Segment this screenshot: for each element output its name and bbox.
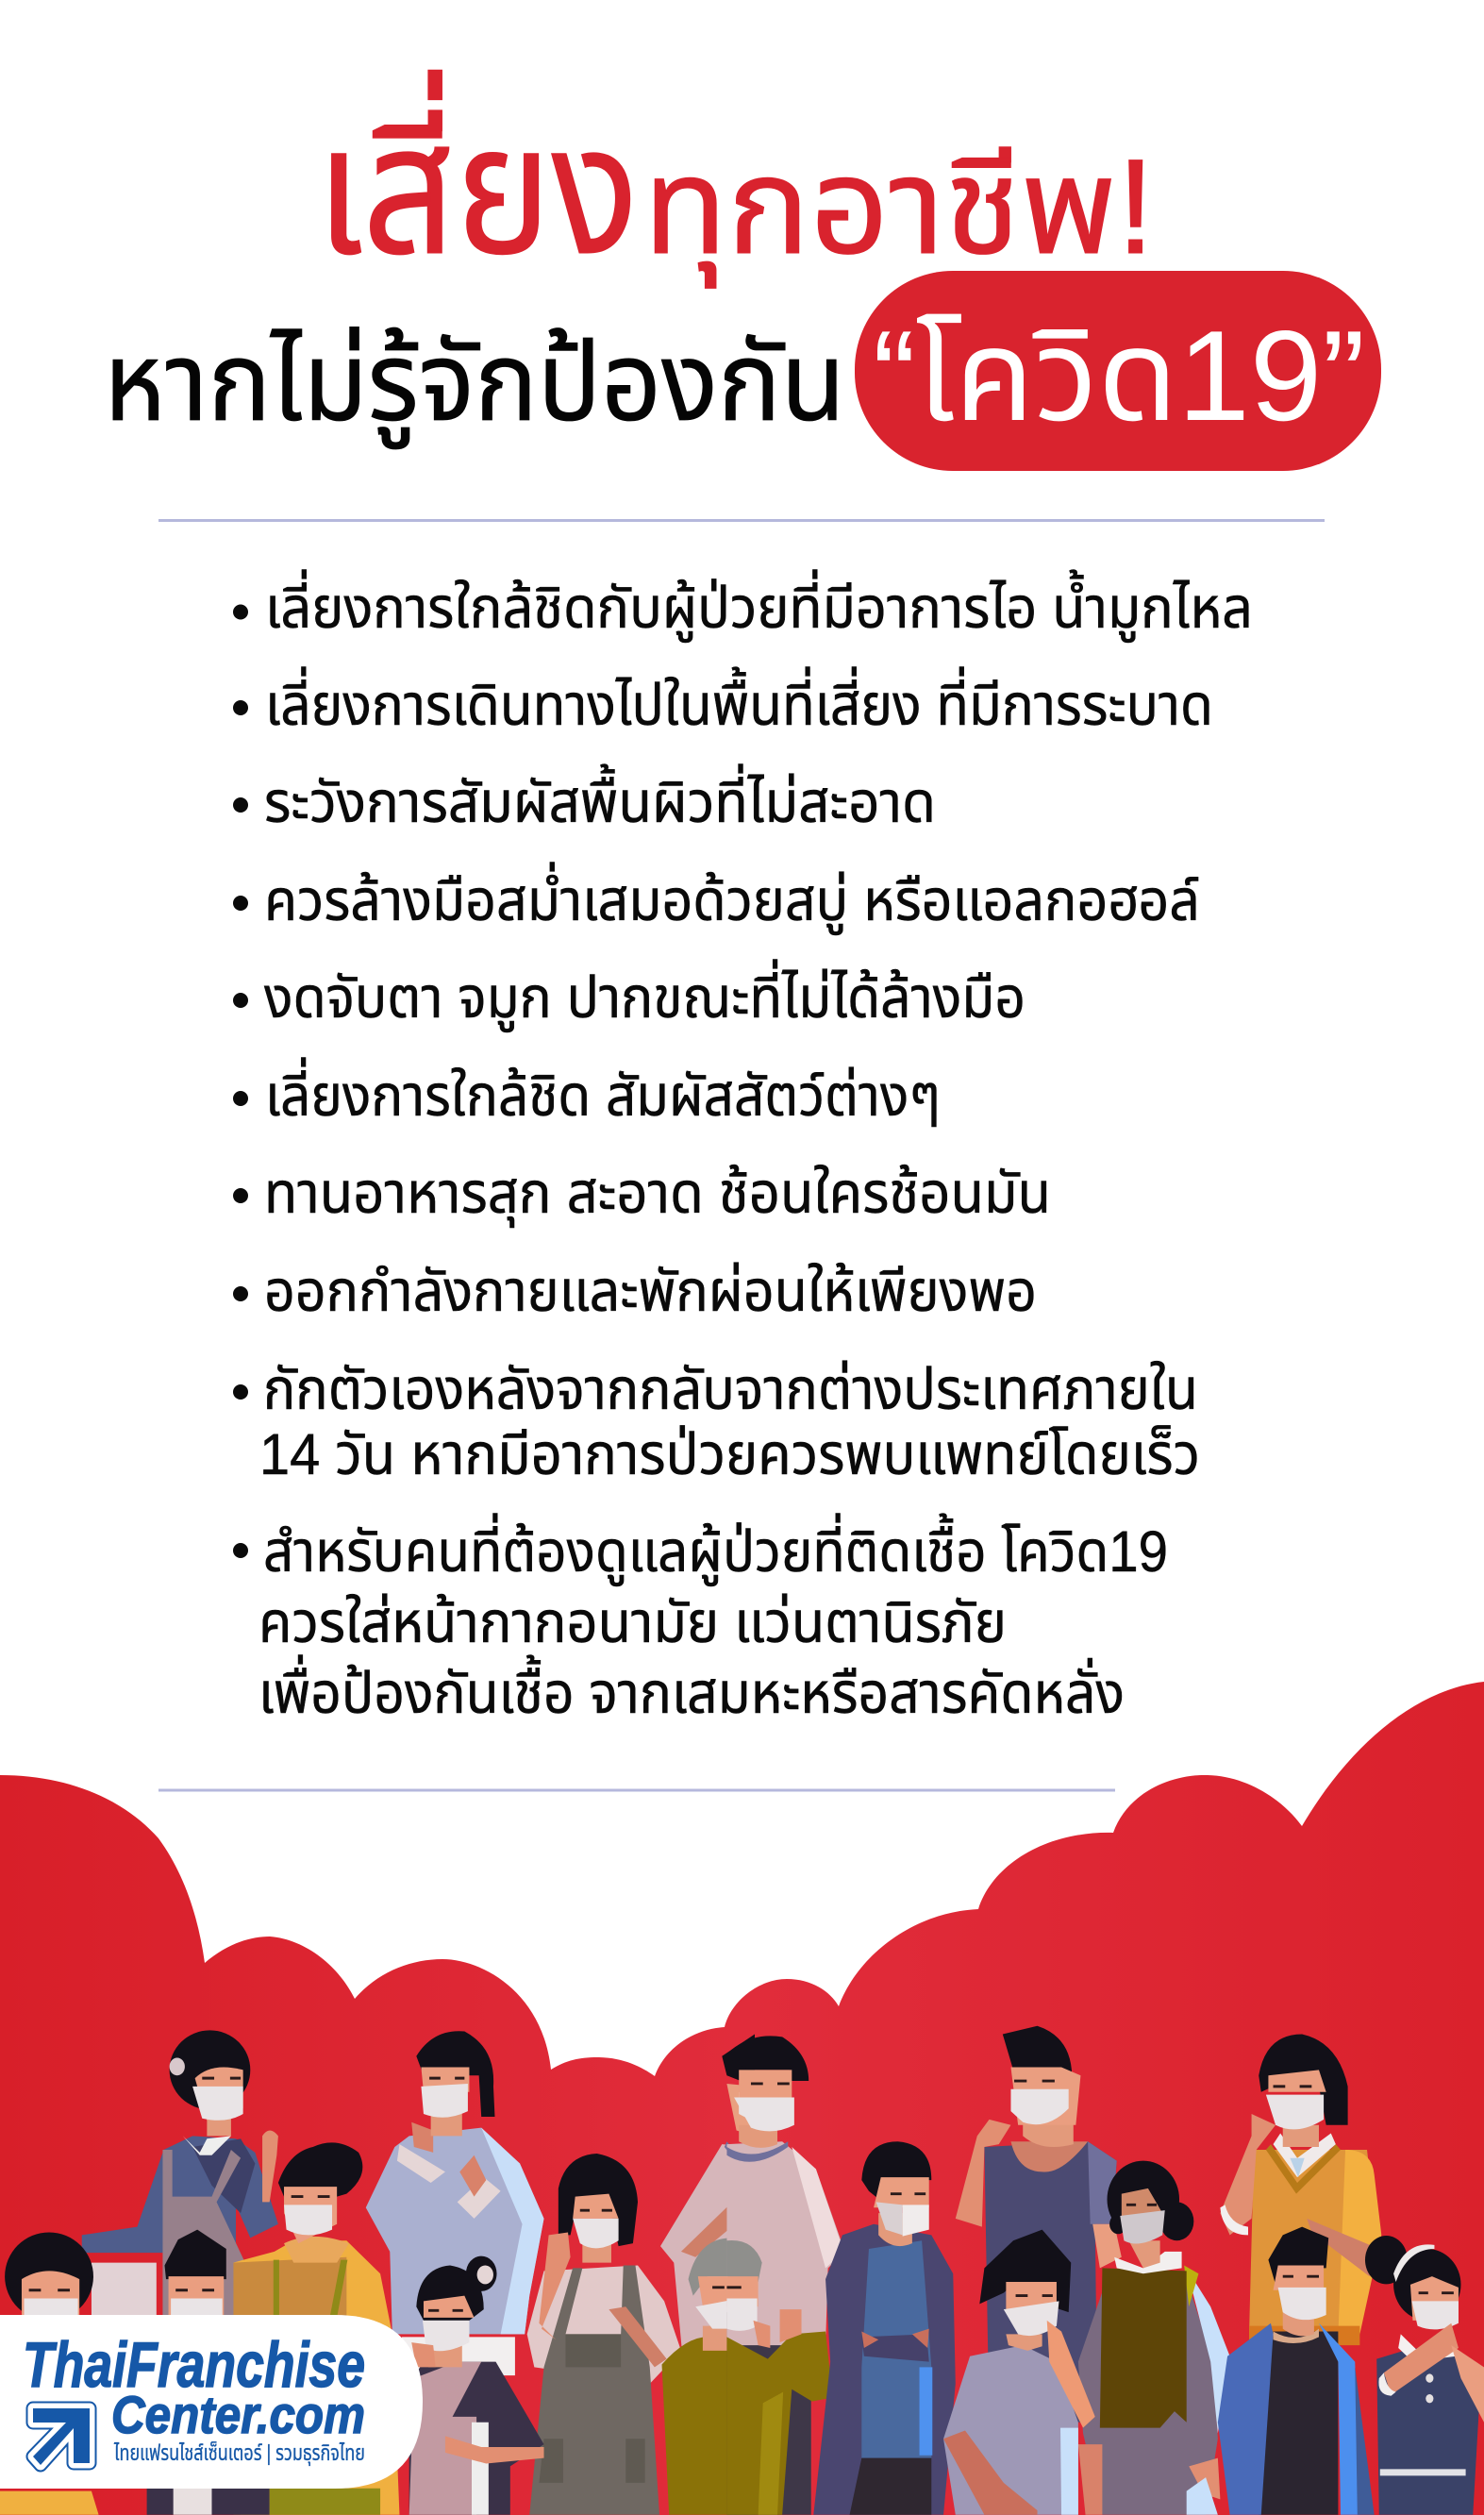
girl bottom left bbox=[5, 2232, 93, 2321]
logo icon: arrow bbox=[33, 2408, 90, 2465]
bullet 10 bbox=[233, 1513, 1168, 1725]
tall man pink tee, right part bbox=[725, 2036, 844, 2515]
title: เสี่ยงทุกอาชีพ!: ทุกอาชีพ! bbox=[643, 132, 1155, 288]
bullet 8: ออกกำลังกายและพักผ่อนให้เพียงพอ bbox=[264, 1259, 1037, 1323]
girl with bun bbox=[409, 2256, 544, 2515]
badge: โควิด19: “โควิด19” bbox=[873, 304, 1365, 447]
bullet 10: ควรใส่หน้ากากอนามัย แว่นตานิรภัย bbox=[258, 1590, 1007, 1654]
people illustration: right group bbox=[725, 2026, 1484, 2515]
logo wordmark top: ThaiFranchise bbox=[23, 2329, 365, 2401]
tall man pink tee, left part bbox=[660, 2034, 755, 2367]
bullet list bbox=[233, 569, 1253, 1725]
woman in olive vest bbox=[1078, 2161, 1230, 2515]
bullet 10: สำหรับคนที่ต้องดูแลผู้ป่วยที่ติดเชื้อ โควิด19 bbox=[263, 1513, 1168, 1586]
bullet 9: 14 วัน หากมีอาการป่วยควรพบแพทย์โดยเร็ว bbox=[259, 1422, 1200, 1486]
woman with apron bbox=[82, 2030, 278, 2323]
logo badge bbox=[0, 2315, 423, 2489]
bullet 9 bbox=[233, 1357, 1200, 1486]
man in navy tee bbox=[956, 2026, 1122, 2423]
man in yellow vest bbox=[1220, 2034, 1381, 2345]
red cloud background bbox=[0, 1682, 1484, 2515]
boy in grey hat and olive jacket, right part bbox=[726, 2240, 833, 2515]
man in blue blazer bbox=[1218, 2227, 1375, 2515]
bullet 5: งดจับตา จมูก ปากขณะที่ไม่ได้ล้างมือ bbox=[264, 959, 1025, 1032]
bullet 10: เพื่อป้องกันเชื้อ จากเสมหะหรือสารคัดหลั่ง bbox=[258, 1654, 1125, 1725]
girl with bow bbox=[1365, 2236, 1484, 2515]
bullet 2: เลี่ยงการเดินทางไปในพื้นที่เสี่ยง ที่มีการระบาด bbox=[265, 666, 1213, 737]
boy in grey tee bbox=[943, 2230, 1095, 2515]
grey box bbox=[92, 2263, 157, 2318]
bullet 9: กักตัวเองหลังจากกลับจากต่างประเทศภายใน bbox=[263, 1357, 1198, 1421]
people illustration: left group bbox=[0, 2030, 755, 2515]
badge: โควิด19 bbox=[855, 271, 1381, 471]
bullet 1: เลี่ยงการใกล้ชิดกับผู้ป่วยที่มีอาการไอ น้ำมูกไหล bbox=[265, 569, 1253, 643]
bottom strip of figures bbox=[0, 2489, 380, 2515]
woman with bob and apron bbox=[527, 2154, 681, 2515]
bullet 4: ควรล้างมือสม่ำเสมอด้วยสบู่ หรือแอลกอฮอล์ bbox=[264, 862, 1200, 935]
bullet 7: ทานอาหารสุก สะอาด ช้อนใครช้อนมัน bbox=[264, 1161, 1051, 1228]
boy in yellow hoodie bbox=[233, 2142, 399, 2515]
subtitle: หากไม่รู้จักป้องกัน bbox=[104, 321, 845, 449]
title: เสี่ยงทุกอาชีพ! bbox=[316, 70, 1155, 292]
boy in grey hat and olive jacket, left part bbox=[662, 2238, 755, 2515]
logo wordmark bottom: Center.com bbox=[111, 2385, 365, 2444]
bullet 6: เลี่ยงการใกล้ชิด สัมผัสสัตว์ต่างๆ bbox=[265, 1057, 941, 1128]
logo tagline: ไทยแฟรนไชส์เซ็นเตอร์ | รวมธุรกิจไทย bbox=[113, 2440, 365, 2466]
boy front left bbox=[164, 2230, 226, 2321]
man in hooded jacket bbox=[813, 2141, 956, 2515]
title: เสี่ยงทุกอาชีพ!: เสี่ยง bbox=[316, 70, 639, 292]
bullet 3: ระวังการสัมผัสพื้นผิวที่ไม่สะอาด bbox=[264, 763, 936, 834]
man in light blue sweatshirt bbox=[366, 2031, 544, 2375]
